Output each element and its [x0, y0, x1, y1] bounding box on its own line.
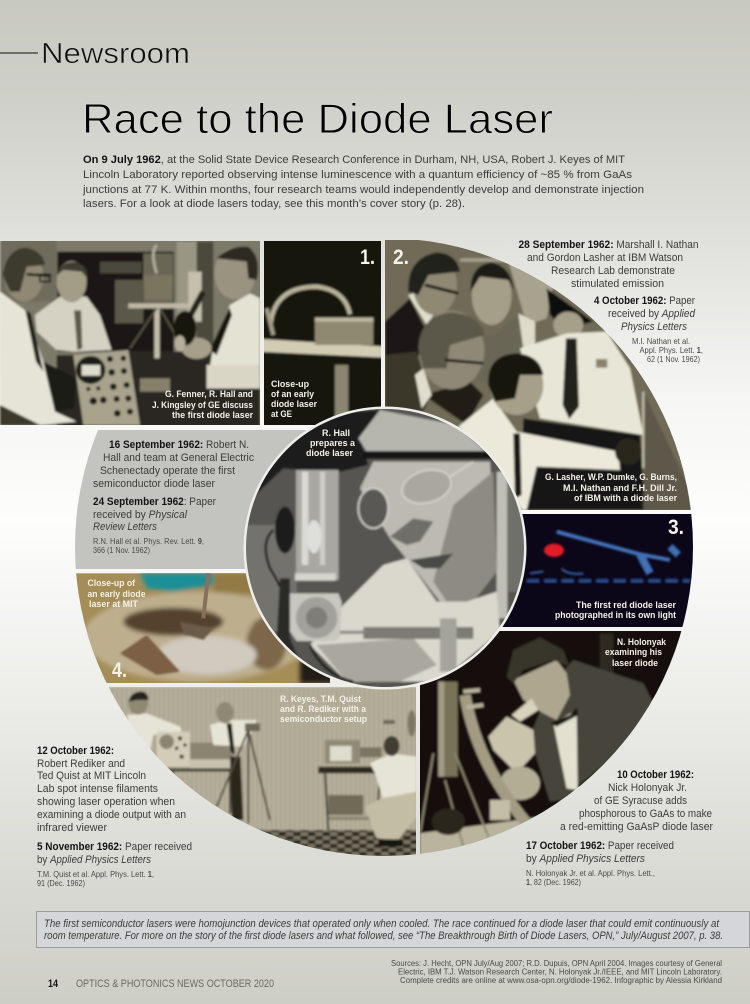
text block: IBM milestones: stimulated emission: [571, 278, 664, 290]
text: GE milestones: Schenectady operate the first: [100, 465, 235, 477]
text block: MIT milestones: 12 October 1962:: [37, 745, 114, 757]
caption: G. Fenner, R. Hall and: [165, 389, 253, 400]
text block: IBM milestones: received by Applied: [608, 308, 696, 320]
caption: [556, 602, 676, 620]
text block: IBM milestones: 4 October 1962: Paper: [594, 295, 695, 307]
text: GE milestones: R.N. Hall et al. Phys. Rev. Lett. 9,: [93, 537, 204, 546]
gray background: [70, 430, 320, 569]
caption: M.I. Nathan and F.H. Dill Jr.: [563, 483, 677, 494]
caption: of an early: [271, 389, 315, 400]
intro text block: On 9 July 1962, at the Solid State Device Research Conference in Durham, NH, USA, Robert J. Keyes of MIT: [83, 154, 625, 166]
text block: MIT milestones: T.M. Quist et al. Appl. Phys. Lett. 1,: [37, 870, 154, 879]
photo panel: close-up at GE: [264, 241, 381, 425]
text block: IBM milestones: 62 (1 Nov. 1962): [647, 355, 700, 364]
caption: G. Lasher, W.P. Dumke, G. Burns,: [545, 472, 677, 483]
text block: MIT milestones: infrared viewer: [37, 822, 107, 834]
text block: IBM milestones: and Gordon Lasher at IBM Watson: [527, 252, 683, 264]
sources: [391, 959, 722, 985]
text block: GE Syracuse milestones: 1, 82 (Dec. 1962): [526, 878, 581, 887]
photo: early MIT diode laser: [76, 573, 330, 683]
photo panel: Holonyak: [410, 627, 687, 860]
caption: Close-up of: [88, 578, 136, 589]
text block: MIT milestones: 91 (Dec. 1962): [37, 879, 85, 888]
photo: semiconductor setup: [108, 687, 416, 856]
white ring: [245, 408, 525, 688]
text: GE milestones: received by Physical: [93, 509, 188, 521]
text block: IBM milestones: M.I. Nathan et al.: [632, 337, 690, 346]
text block: MIT milestones: showing laser operation when: [37, 796, 175, 808]
number: 2.: [393, 246, 409, 269]
caption: J. Kingsley of GE discuss: [152, 400, 253, 411]
text block: MIT milestones: by Applied Physics Letters: [37, 854, 151, 866]
photo panel: MIT close-up: [76, 573, 330, 683]
caption: at GE: [271, 409, 292, 420]
text block: MIT milestones: 5 November 1962: Paper received: [37, 841, 192, 853]
caption: diode laser: [306, 448, 353, 459]
text block: GE Syracuse milestones: 17 October 1962: Paper received: [526, 840, 674, 852]
caption: prepares a: [310, 438, 356, 449]
text block: GE Syracuse milestones: [526, 769, 713, 887]
sources: Electric, IBM T.J. Watson Research Center, N. Holonyak Jr./IEEE, and MIT Lincoln Laboratory.: [398, 968, 722, 976]
caption: examining his: [605, 647, 662, 658]
caption: photographed in its own light: [555, 610, 677, 621]
page number and folio: 14: [48, 978, 59, 990]
caption: Close-up: [271, 379, 309, 390]
caption: [280, 694, 367, 725]
photo: R. Hall prepares a diode laser: [240, 405, 530, 692]
page number and folio: OPTICS & PHOTONICS NEWS OCTOBER 2020: [76, 978, 274, 990]
caption: laser at MIT: [89, 599, 138, 610]
sources: Sources: J. Hecht, OPN July/Aug 2007; R.D. Dupuis, OPN April 2004. Images courtesy of General: [391, 959, 722, 968]
caption: an early diode: [88, 589, 146, 600]
photo: laser in its own light: [502, 514, 693, 627]
text block: GE Syracuse milestones: N. Holonyak Jr. et al. Appl. Phys. Lett.,: [526, 869, 655, 878]
text: GE milestones: 24 September 1962: Paper: [93, 496, 216, 508]
intro text block: Lincoln Laboratory reported observing intense luminescence with a quantum efficiency of ~85 % from GaAs: [83, 169, 633, 181]
text: GE milestones: 16 September 1962: Robert N.: [109, 439, 249, 451]
text block: MIT milestones: Lab spot intense filaments: [37, 783, 158, 795]
photo panel: Keyes, Quist, Rediker: [108, 687, 416, 856]
photo panel: GE team: [0, 235, 263, 428]
text block: GE Syracuse milestones: by Applied Physics Letters: [526, 853, 645, 865]
text block: GE Syracuse milestones: a red-emitting GaAsP diode laser: [560, 821, 713, 833]
caption: [271, 380, 317, 417]
caption: the first diode laser: [172, 410, 253, 421]
central circular photo: R. Hall: [240, 405, 530, 692]
text block: GE Syracuse milestones: phosphorous to GaAs to make: [579, 808, 712, 820]
caption: [545, 474, 677, 501]
intro text block: [82, 154, 644, 210]
sources: Complete credits are online at www.osa-opn.org/diode-1962. Infographic by Alessia Kirkland: [400, 976, 722, 985]
photo panel: IBM team: [380, 235, 700, 512]
photo: Holonyak at microscope: [410, 627, 687, 860]
text block: IBM milestones: [518, 239, 703, 364]
text block: MIT milestones: [37, 745, 192, 888]
number: 1.: [360, 246, 375, 269]
caption: [88, 580, 146, 607]
photo: five men around a diode laser: [380, 235, 700, 512]
caption: of IBM with a diode laser: [574, 493, 677, 504]
text: GE milestones: 366 (1 Nov. 1962): [93, 546, 150, 555]
text block: IBM milestones: Research Lab demonstrate: [551, 265, 675, 277]
text: GE milestones: Review Letters: [93, 521, 157, 533]
caption: [152, 390, 253, 418]
text: GE milestones: Hall and team at General Electric: [103, 452, 254, 464]
photo: diode laser close-up: [264, 241, 381, 425]
section heading: Newsroom: Newsroom: [41, 38, 190, 70]
caption: N. Holonyak: [617, 637, 667, 648]
number: 4.: [112, 659, 127, 682]
caption: [306, 428, 356, 459]
intro text block: junctions at 77 K. Within months, four research teams would independently develop and demonstrate injection: [82, 184, 644, 196]
caption: The first red diode laser: [576, 600, 676, 611]
caption: diode laser: [271, 399, 317, 410]
photo panel: first red diode laser: [502, 514, 693, 627]
text block: IBM milestones: Appl. Phys. Lett. 1,: [640, 346, 703, 355]
text block: GE Syracuse milestones: of GE Syracuse adds: [594, 795, 687, 807]
panel: GE timeline text: [70, 430, 320, 569]
caption: semiconductor setup: [280, 714, 367, 725]
title: Race to the Diode Laser: [82, 95, 553, 142]
text block: MIT milestones: Robert Rediker and: [37, 758, 125, 770]
text: GE milestones: [93, 439, 254, 555]
text block: IBM milestones: 28 September 1962: Marshall I. Nathan: [518, 239, 698, 251]
callout box: [36, 912, 750, 948]
photo: three men with oscilloscope: [0, 235, 263, 428]
caption: and R. Rediker with a: [280, 704, 367, 715]
text block: GE Syracuse milestones: Nick Holonyak Jr.: [608, 782, 687, 794]
caption: [605, 638, 666, 666]
text block: GE Syracuse milestones: 10 October 1962:: [617, 769, 694, 781]
caption: R. Hall: [322, 428, 350, 439]
text: GE milestones: semiconductor diode laser: [93, 478, 215, 490]
number: 3.: [668, 516, 684, 539]
caption: R. Keyes, T.M. Quist: [280, 694, 362, 705]
text block: IBM milestones: Physics Letters: [621, 321, 687, 333]
caption: laser diode: [612, 658, 658, 669]
text block: MIT milestones: Ted Quist at MIT Lincoln: [37, 770, 146, 782]
text block: MIT milestones: examining a diode output with an: [37, 809, 186, 821]
intro text block: lasers. For a look at diode lasers today, see this month’s cover story (p. 28).: [83, 198, 465, 210]
